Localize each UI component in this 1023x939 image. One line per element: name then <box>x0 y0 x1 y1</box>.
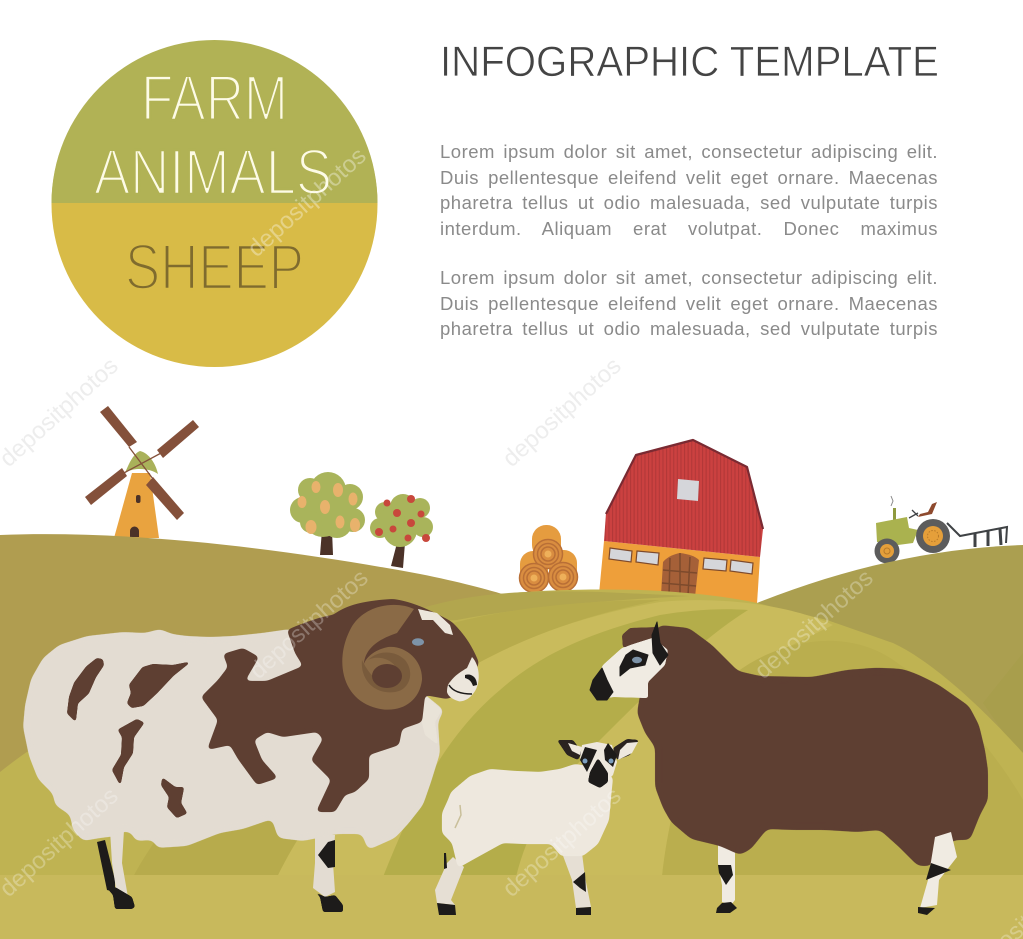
ram front leg <box>312 835 343 912</box>
field light stripe <box>277 600 833 877</box>
lamb fleece <box>442 764 613 868</box>
body paragraph two: Duis pellentesque eleifend velit eget ornare. Maecenas <box>440 293 938 314</box>
ram neck ruff <box>420 693 442 745</box>
pear tree <box>290 472 365 555</box>
badge heading: animals: ANIMALS <box>94 136 332 208</box>
body paragraph one: interdum. Aliquam erat volutpat. Donec maximus <box>440 218 938 239</box>
hill: back left <box>0 534 512 790</box>
hill: back right <box>757 545 1023 800</box>
ram spots <box>68 659 188 817</box>
ground strip <box>0 875 1023 939</box>
sheep muzzle <box>590 668 613 700</box>
body paragraph two <box>440 267 938 339</box>
body paragraph one: Duis pellentesque eleifend velit eget ornare. Maecenas <box>440 167 938 188</box>
field outer dome <box>0 590 1023 939</box>
ram muzzle <box>447 657 479 701</box>
stock photo watermarks: depositphotos <box>244 564 374 684</box>
ram forehead patch <box>418 609 453 635</box>
sheep horn <box>652 622 668 665</box>
body paragraph one <box>440 141 938 239</box>
hay bales <box>520 525 578 592</box>
barn windows <box>609 548 753 574</box>
sheep face <box>590 637 668 700</box>
striped centre field <box>0 590 1023 939</box>
barn <box>599 440 763 604</box>
field stripe two <box>383 609 748 877</box>
body paragraph one: pharetra tellus ut odio malesuada, sed vulputate turpis <box>440 192 938 213</box>
lamb face <box>580 742 617 788</box>
brown sheep <box>590 622 988 915</box>
field stripe one <box>133 600 660 877</box>
tractor with plough <box>874 496 1007 564</box>
sheep back leg <box>918 832 957 915</box>
sheep head top wool <box>622 627 660 648</box>
ram brown saddle and head <box>201 599 479 812</box>
ram back leg <box>97 830 135 909</box>
stock photo watermarks: depositphotos <box>749 564 879 684</box>
title: INFOGRAPHIC TEMPLATE <box>440 38 939 86</box>
windmill <box>85 406 199 538</box>
stock photo watermarks: depositphotos <box>497 782 627 902</box>
ram horn <box>342 605 422 710</box>
barn loft window <box>677 479 699 501</box>
badge: farm animals sheep <box>52 40 378 367</box>
body paragraph two: pharetra tellus ut odio malesuada, sed vulputate turpis <box>440 318 938 339</box>
stock photo watermarks: depositphotos <box>497 352 627 472</box>
badge heading: farm: FARM <box>141 62 288 134</box>
ram fleece <box>23 629 444 850</box>
ram eye <box>412 638 424 646</box>
field stripe three <box>662 641 1023 877</box>
badge heading: sheep: SHEEP <box>125 231 304 303</box>
apple tree <box>370 494 433 568</box>
body paragraph two: Lorem ipsum dolor sit amet, consectetur adipiscing elit. <box>440 267 938 288</box>
body paragraph one: Lorem ipsum dolor sit amet, consectetur adipiscing elit. <box>440 141 938 162</box>
ram <box>23 599 479 912</box>
lamb legs <box>435 853 591 915</box>
barn door <box>661 553 699 597</box>
lamb tail crease <box>455 805 461 828</box>
lamb <box>435 739 639 915</box>
field top shadow wedge <box>417 591 690 621</box>
sheep front leg <box>716 843 737 913</box>
stock photo watermarks: depositphotos <box>242 142 372 262</box>
sheep fleece <box>637 625 988 866</box>
sheep eye patch <box>620 650 648 676</box>
lamb ears <box>557 739 639 760</box>
